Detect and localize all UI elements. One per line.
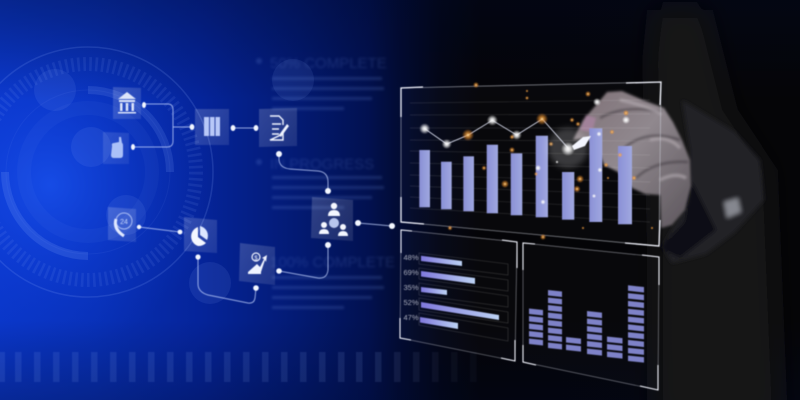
progress labels bbox=[403, 253, 419, 322]
column segments bbox=[529, 285, 644, 363]
heading: in progress: IN PROGRESS bbox=[270, 156, 374, 173]
progress fills bbox=[420, 256, 499, 329]
orange sparkles bbox=[448, 82, 654, 240]
icon: document with pen bbox=[259, 108, 297, 147]
progress labels: 48% bbox=[403, 253, 419, 262]
workflow connectors bbox=[133, 104, 392, 303]
progress labels: 35% bbox=[403, 283, 419, 292]
column frame bbox=[523, 243, 659, 390]
icon: lock bbox=[103, 132, 129, 164]
faint bottom bar strip bbox=[0, 352, 476, 382]
progress labels: 52% bbox=[403, 298, 419, 307]
icon: team network bbox=[311, 197, 353, 241]
trend line bbox=[425, 119, 568, 148]
heading: 50% complete: 50% COMPLETE bbox=[270, 55, 387, 72]
chart frame bbox=[401, 82, 661, 246]
panel: segmented column chart bbox=[523, 243, 659, 390]
panel: main bar and line chart bbox=[401, 82, 661, 246]
faint status text blocks bbox=[256, 55, 395, 309]
businessman silhouette bbox=[650, 10, 780, 400]
hand bbox=[573, 91, 691, 228]
connector dots bbox=[131, 102, 395, 291]
progress labels: 47% bbox=[403, 313, 419, 322]
icon: 24h phone: 24 bbox=[120, 219, 128, 226]
rings decoration bbox=[0, 47, 213, 297]
trend points bbox=[419, 115, 522, 149]
icon: growth chart bbox=[239, 243, 275, 285]
icon: bank bbox=[113, 87, 141, 119]
chart bars bbox=[419, 128, 632, 224]
stylus highlight bbox=[548, 128, 591, 168]
progress tracks bbox=[419, 253, 508, 341]
suit sleeve and cufflink bbox=[660, 100, 764, 263]
progress labels: 69% bbox=[403, 268, 419, 277]
icon: growth chart: $ bbox=[254, 256, 258, 262]
heading: 100% complete: 100% COMPLETE bbox=[270, 254, 395, 271]
chart grid bbox=[410, 100, 650, 222]
icon: server columns bbox=[195, 109, 229, 145]
panel: horizontal progress bars bbox=[400, 230, 517, 361]
white sparkles bbox=[535, 98, 630, 204]
icon: 24h phone bbox=[108, 207, 136, 242]
progress frame bbox=[400, 230, 517, 361]
icon: pie chart bbox=[184, 217, 217, 253]
translucent bokeh circles bbox=[34, 59, 314, 304]
